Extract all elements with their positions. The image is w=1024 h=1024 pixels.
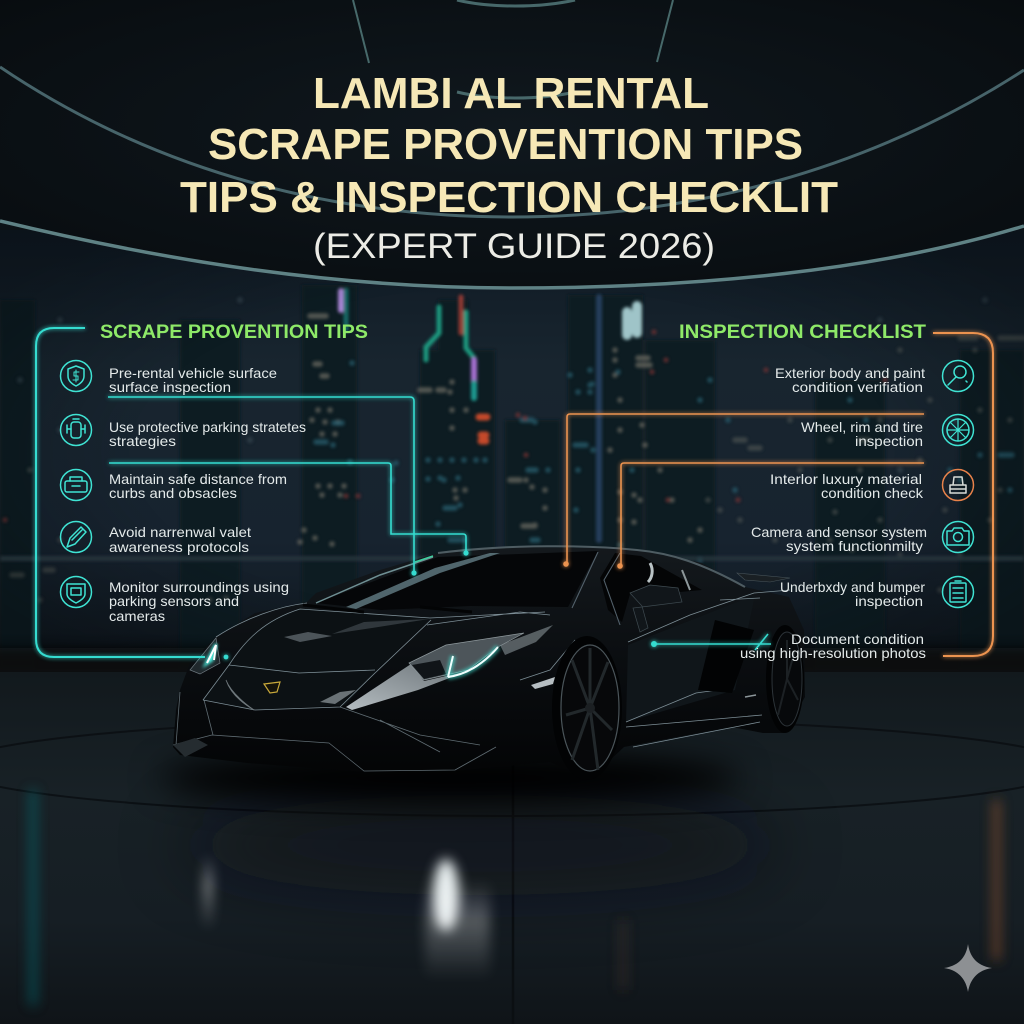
icon: camera xyxy=(942,522,974,552)
callout connector: left frame headlight dot xyxy=(224,655,228,659)
text: underbody: Underbxdy and bumper xyxy=(780,579,925,595)
windshield xyxy=(316,551,598,610)
door panel reflection xyxy=(626,595,755,722)
background: curved ceiling xyxy=(0,0,1024,288)
text: protective parking: Use protective parking stratetes xyxy=(109,419,306,435)
heading: scrape provention tips: SCRAPE PROVENTION TIPS xyxy=(100,322,368,343)
panel: inspection checklist xyxy=(679,322,974,661)
icon: toolbox xyxy=(60,470,92,500)
title: TIPS & INSPECTION CHECKLIT xyxy=(180,173,838,222)
text: pre-rental inspection: Pre-rental vehicle surface xyxy=(109,365,277,381)
title: LAMBI AL RENTAL xyxy=(313,69,709,118)
hood panels xyxy=(203,609,430,710)
icon: sensor shield xyxy=(60,576,92,608)
text: monitor surroundings: parking sensors and xyxy=(109,593,239,609)
text: monitor surroundings: cameras xyxy=(109,608,165,624)
background: city skyline xyxy=(0,230,1024,678)
text: document condition: using high-resolution photos xyxy=(740,645,926,661)
wipers xyxy=(303,605,472,612)
text: monitor surroundings xyxy=(109,579,289,624)
text: protective parking: strategies xyxy=(109,433,176,449)
text: exterior body: Exterior body and paint xyxy=(775,365,925,381)
panel: scrape provention tips xyxy=(60,322,368,624)
text: exterior body: condition verifiation xyxy=(792,379,923,395)
heading: inspection checklist: INSPECTION CHECKLIST xyxy=(679,322,926,343)
text: safe distance xyxy=(109,471,287,501)
static lights warm xyxy=(300,316,700,544)
title: SCRAPE PROVENTION TIPS xyxy=(208,120,803,169)
text: wheel inspection: Wheel, rim and tire xyxy=(801,419,923,435)
callout connector: wheel inspection to roof xyxy=(563,414,924,567)
front wheel xyxy=(552,636,622,780)
rear spoiler xyxy=(737,573,790,582)
text: wheel inspection: inspection xyxy=(855,433,923,449)
callout connector: pre-rental inspection to windshield xyxy=(108,397,417,576)
title xyxy=(180,69,838,266)
icon: seat xyxy=(942,470,974,500)
text: valet awareness: Avoid narrenwal valet xyxy=(109,524,251,540)
text: interior check xyxy=(770,471,924,501)
logo xyxy=(264,682,280,693)
icon: sparkle watermark xyxy=(944,944,992,992)
text: interior check: condition check xyxy=(821,485,924,501)
fender highlight xyxy=(346,664,468,710)
background: reflective floor xyxy=(0,672,1024,1024)
text: monitor surroundings: Monitor surroundings using xyxy=(109,579,289,595)
icon: magnifier xyxy=(942,360,974,392)
text: document condition xyxy=(740,631,926,661)
title: (EXPERT GUIDE 2026) xyxy=(313,227,715,266)
text: camera and sensor: system functionmilty xyxy=(786,538,923,554)
icon: pen xyxy=(60,522,92,552)
text: exterior body xyxy=(775,365,925,395)
text: interior check: Interlor luxury material xyxy=(770,471,922,487)
text: valet awareness: awareness protocols xyxy=(109,539,249,555)
callout connector: safe distance to roofline xyxy=(109,463,469,556)
text: valet awareness xyxy=(109,524,251,555)
door and side lines xyxy=(520,590,790,747)
text: safe distance: Maintain safe distance from xyxy=(109,471,287,487)
text: pre-rental inspection: surface inspection xyxy=(109,379,231,395)
callout connector: interior check to door xyxy=(617,463,924,569)
text: pre-rental inspection xyxy=(109,365,277,395)
callout connector: document condition to body xyxy=(651,634,771,650)
text: protective parking xyxy=(109,419,306,449)
icon: parking car xyxy=(60,414,92,446)
mirror xyxy=(630,585,682,632)
left headlight xyxy=(190,638,220,674)
icon: wheel xyxy=(942,414,974,446)
roof and door window xyxy=(438,546,745,587)
rear wheel xyxy=(766,625,804,733)
text: underbody xyxy=(780,579,925,609)
car body silhouette xyxy=(173,547,805,780)
callout connector: right frame xyxy=(933,333,993,656)
text: safe distance: curbs and obsacles xyxy=(109,485,237,501)
right headlight xyxy=(409,633,524,680)
text: document condition: Document condition xyxy=(791,631,924,647)
callout connector: left frame xyxy=(36,328,205,657)
text: wheel inspection xyxy=(801,419,923,449)
icon: clipboard xyxy=(942,576,974,608)
icon: shield xyxy=(60,360,92,392)
bumper xyxy=(173,692,496,771)
text: underbody: inspection xyxy=(855,593,923,609)
sports car xyxy=(173,546,805,780)
text: camera and sensor xyxy=(751,524,927,554)
text: camera and sensor: Camera and sensor system xyxy=(751,524,927,540)
